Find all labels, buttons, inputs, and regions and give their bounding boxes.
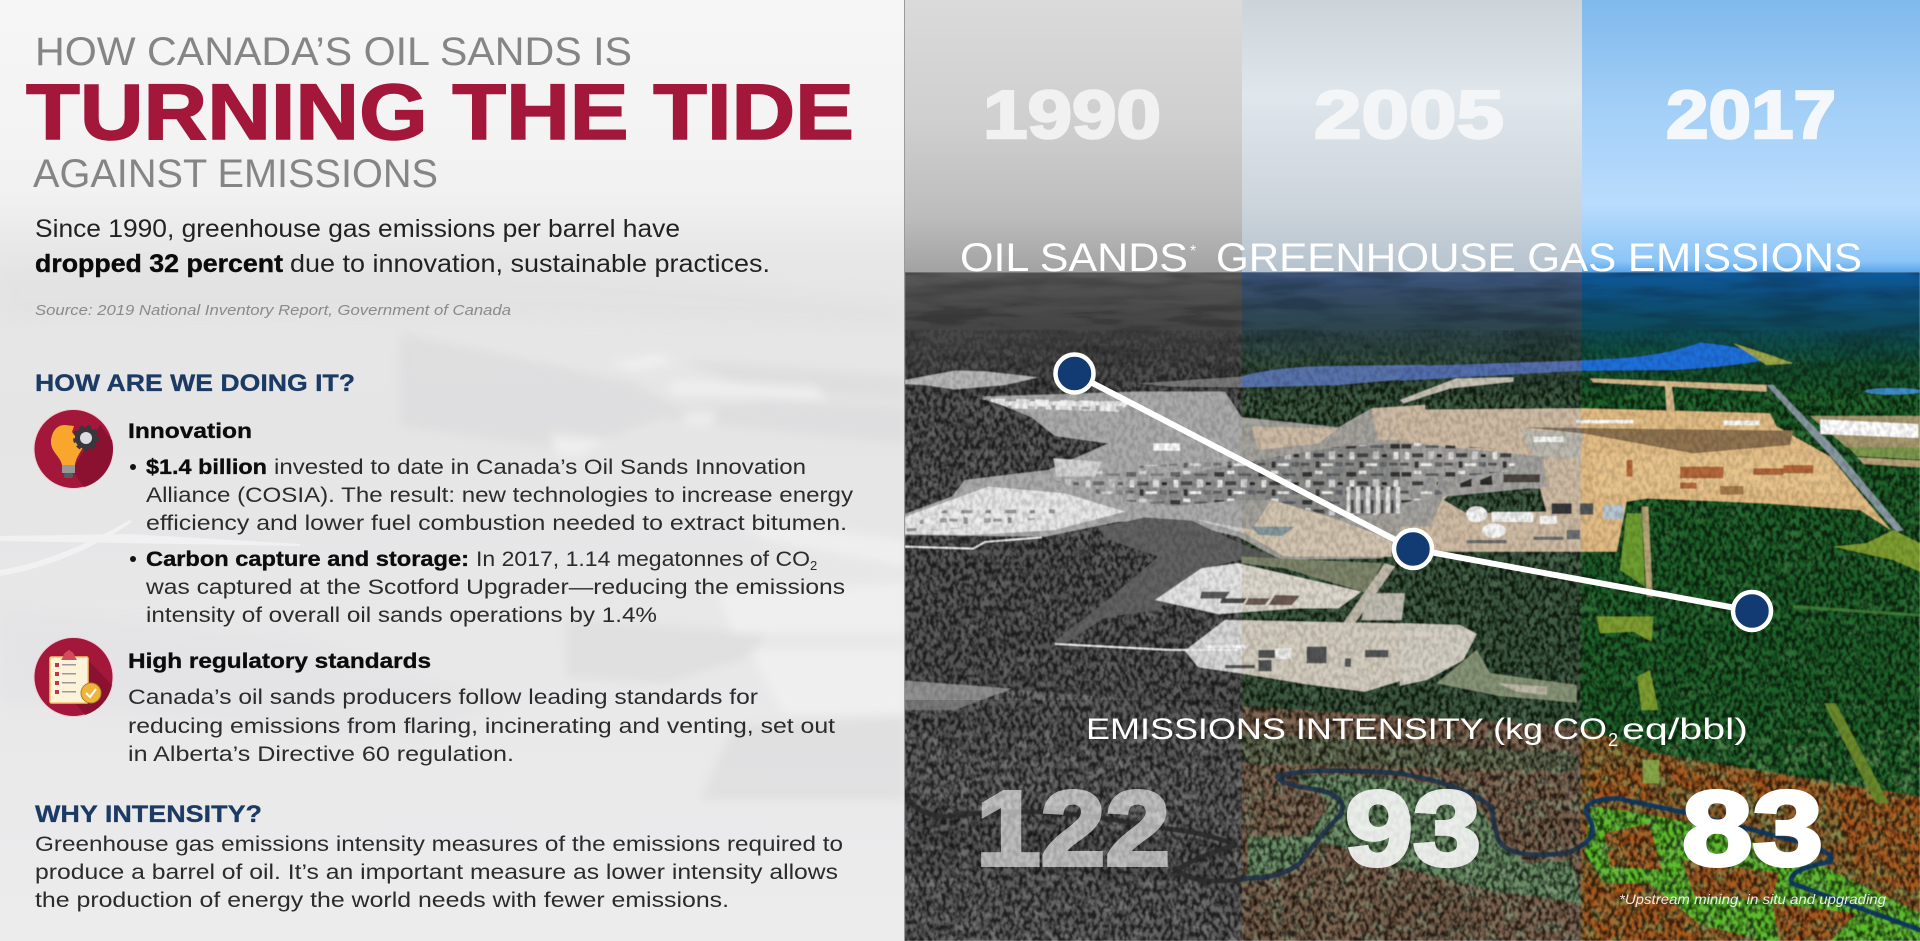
text block: why intensity: produce a barrel of oil. It’s an important measure as lower intensity allows bbox=[35, 860, 838, 884]
text block: why intensity bbox=[35, 832, 843, 912]
axis label: emissions intensity: eq/bbl) bbox=[1622, 713, 1748, 746]
shade over lower 1990 landscape bbox=[905, 700, 1242, 941]
title bbox=[26, 30, 854, 196]
text block: innovation bullet 1 bbox=[130, 455, 853, 535]
axis label: emissions intensity bbox=[1086, 713, 1748, 750]
footnote: *Upstream mining, in situ and upgrading bbox=[1619, 892, 1887, 907]
divider edge bbox=[904, 0, 906, 941]
chart heading bbox=[960, 236, 1862, 280]
text block: innovation bullet 1: invested to date in Canada’s Oil Sands Innovation bbox=[274, 455, 806, 479]
text block: regulatory standards: reducing emissions from flaring, incinerating and venting, set out bbox=[128, 714, 835, 738]
source note: Source: 2019 National Inventory Report, Government of Canada bbox=[35, 303, 511, 319]
chart heading: * bbox=[1190, 243, 1196, 260]
text block: innovation bullet 2: was captured at the Scotford Upgrader—reducing the emissions bbox=[145, 575, 845, 599]
heading: why intensity: WHY INTENSITY? bbox=[35, 801, 262, 828]
subheading: innovation: Innovation bbox=[128, 419, 252, 443]
line chart: emissions trend bbox=[1056, 354, 1771, 630]
text block: regulatory standards: Canada’s oil sands producers follow leading standards for bbox=[128, 685, 758, 709]
year label: 1990: 1990 bbox=[983, 77, 1161, 153]
text block: innovation bullet 1: $1.4 billion bbox=[146, 455, 267, 479]
panel: landscape 1990 greyscale bbox=[905, 272, 1242, 941]
text block: why intensity: the production of energy the world needs with fewer emissions. bbox=[35, 888, 729, 912]
text block: intro: Since 1990, greenhouse gas emissions per barrel have bbox=[35, 215, 680, 243]
panel: sky 2017 bbox=[1582, 0, 1920, 272]
text block: innovation bullet 2: In 2017, 1.14 megatonnes of CO bbox=[476, 547, 810, 571]
text block: why intensity: Greenhouse gas emissions intensity measures of the emissions required to bbox=[35, 832, 843, 856]
text block: intro bbox=[35, 215, 770, 278]
icon: innovation light bulb and gear bbox=[34, 410, 113, 488]
text block: innovation bullet 2: Carbon capture and storage: bbox=[146, 547, 469, 571]
chart heading: OIL SANDS bbox=[960, 236, 1188, 280]
panel: landscape 2005 muted bbox=[1242, 272, 1582, 941]
panel: sky 1990 bbox=[905, 0, 1242, 272]
text block: innovation bullet 2: intensity of overall oil sands operations by 1.4% bbox=[146, 603, 657, 627]
text block: innovation bullet 2: 2 bbox=[810, 558, 817, 573]
title: TURNING THE TIDE bbox=[26, 67, 854, 156]
value: 122: 122 bbox=[976, 770, 1170, 888]
text block: regulatory standards: in Alberta’s Directive 60 regulation. bbox=[128, 742, 514, 766]
value: 93: 93 bbox=[1345, 770, 1481, 888]
icon: regulatory clipboard bbox=[34, 638, 113, 716]
text block: innovation bullet 1: Alliance (COSIA). The result: new technologies to increase energy bbox=[146, 483, 853, 507]
text block: innovation bullet 2 bbox=[130, 547, 845, 627]
heading: how are we doing it: HOW ARE WE DOING IT? bbox=[35, 370, 355, 397]
axis label: emissions intensity: 2 bbox=[1608, 730, 1618, 750]
subheading: high regulatory standards: High regulatory standards bbox=[128, 649, 431, 673]
value: 83: 83 bbox=[1682, 770, 1823, 888]
text block: innovation bullet 1: efficiency and lower fuel combustion needed to extract bitumen. bbox=[146, 511, 847, 535]
year label: 2017: 2017 bbox=[1666, 77, 1836, 153]
title: AGAINST EMISSIONS bbox=[33, 152, 438, 196]
panel: left text background bbox=[0, 0, 905, 941]
text block: intro: due to innovation, sustainable practices. bbox=[290, 250, 770, 278]
axis label: emissions intensity: EMISSIONS INTENSITY (kg CO bbox=[1086, 713, 1607, 746]
panel: sky 2005 bbox=[1242, 0, 1582, 272]
chart heading: GREENHOUSE GAS EMISSIONS bbox=[1216, 236, 1862, 280]
text block: intro: dropped 32 percent bbox=[35, 250, 284, 278]
year label: 2005: 2005 bbox=[1314, 77, 1504, 153]
title: HOW CANADA’S OIL SANDS IS bbox=[35, 30, 632, 74]
text block: regulatory standards bbox=[128, 685, 835, 766]
panel: landscape 2017 colour bbox=[1582, 272, 1920, 941]
